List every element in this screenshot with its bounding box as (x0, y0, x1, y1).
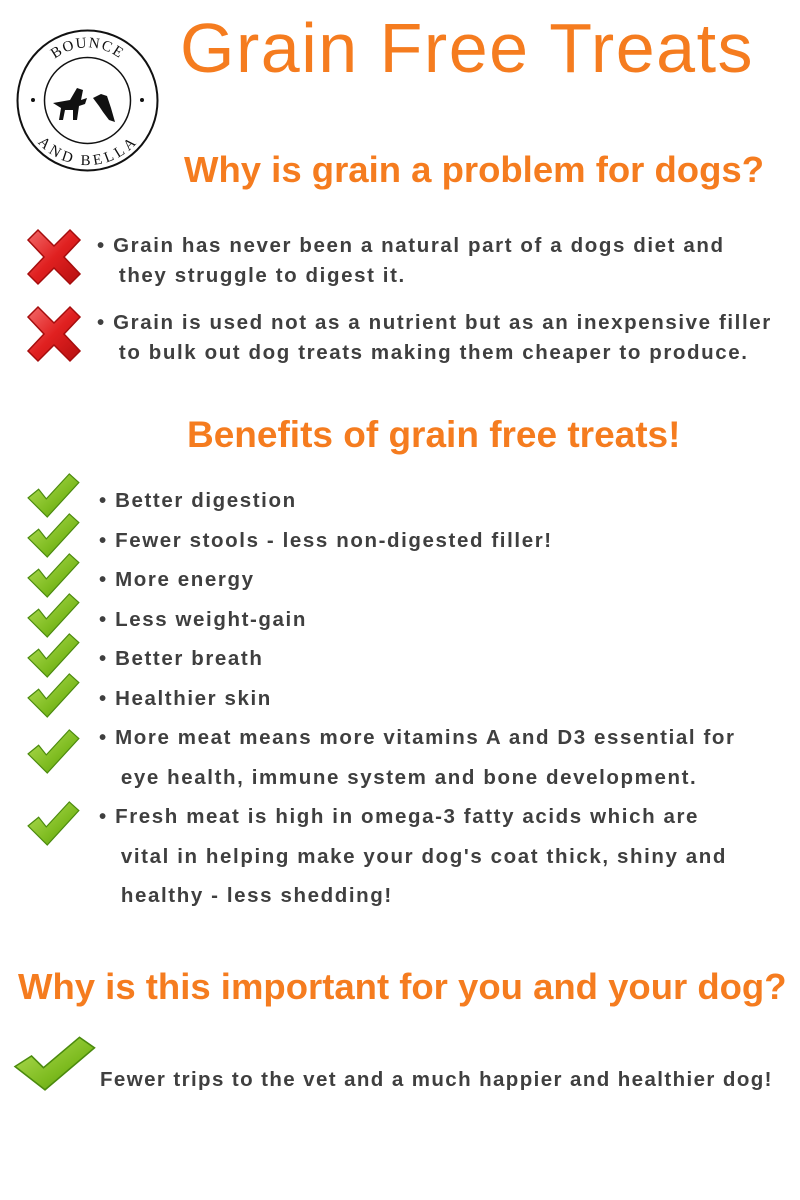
icon: cross 1 (27, 229, 81, 285)
text: benefits list: • More energy (99, 568, 255, 591)
heading: benefits: Benefits of grain free treats! (187, 414, 680, 455)
logo: BOUNCE (50, 38, 124, 58)
text: benefits list: • Healthier skin (99, 686, 272, 710)
text: benefits list: vital in helping make your dog's coat thick, shiny and (121, 844, 727, 868)
text: conclusion: Fewer trips to the vet and a much happier and healthier dog! (100, 1068, 773, 1091)
text: benefits list: • More meat means more vitamins A and D3 essential for (99, 726, 736, 749)
text: benefits list: • Better digestion (99, 489, 297, 512)
heading: why grain problem: Why is grain a problem for dogs? (184, 149, 764, 190)
text: grain problems: • Grain has never been a natural part of a dogs diet and (97, 234, 725, 257)
icon: big checkmark (14, 1036, 96, 1091)
text: grain problems: they struggle to digest it. • Grain is used not as a nutrient but as an inexpensive filler (97, 264, 772, 334)
text: benefits list: healthy - less shedding! (121, 884, 393, 907)
text: benefits list: • Fresh meat is high in omega-3 fatty acids which are (99, 805, 699, 828)
icon: cross 2 (27, 306, 81, 362)
text: benefits list (99, 489, 736, 907)
logo (16, 30, 158, 172)
text: benefits list: eye health, immune system and bone development. (121, 766, 697, 788)
text: benefits list: • Less weight-gain (99, 608, 307, 630)
text: benefits list: • Better breath (99, 647, 263, 670)
text: grain problems: to bulk out dog treats making them cheaper to produce. (119, 341, 749, 364)
heading: why important: Why is this important for you and your dog? (18, 966, 787, 1007)
text: benefits list: • Fewer stools - less non-digested filler! (99, 528, 553, 552)
text: grain problems (97, 234, 772, 364)
title: Grain Free Treats (180, 9, 754, 87)
logo: AND BELLA (38, 138, 136, 166)
checkmark column (27, 473, 80, 846)
